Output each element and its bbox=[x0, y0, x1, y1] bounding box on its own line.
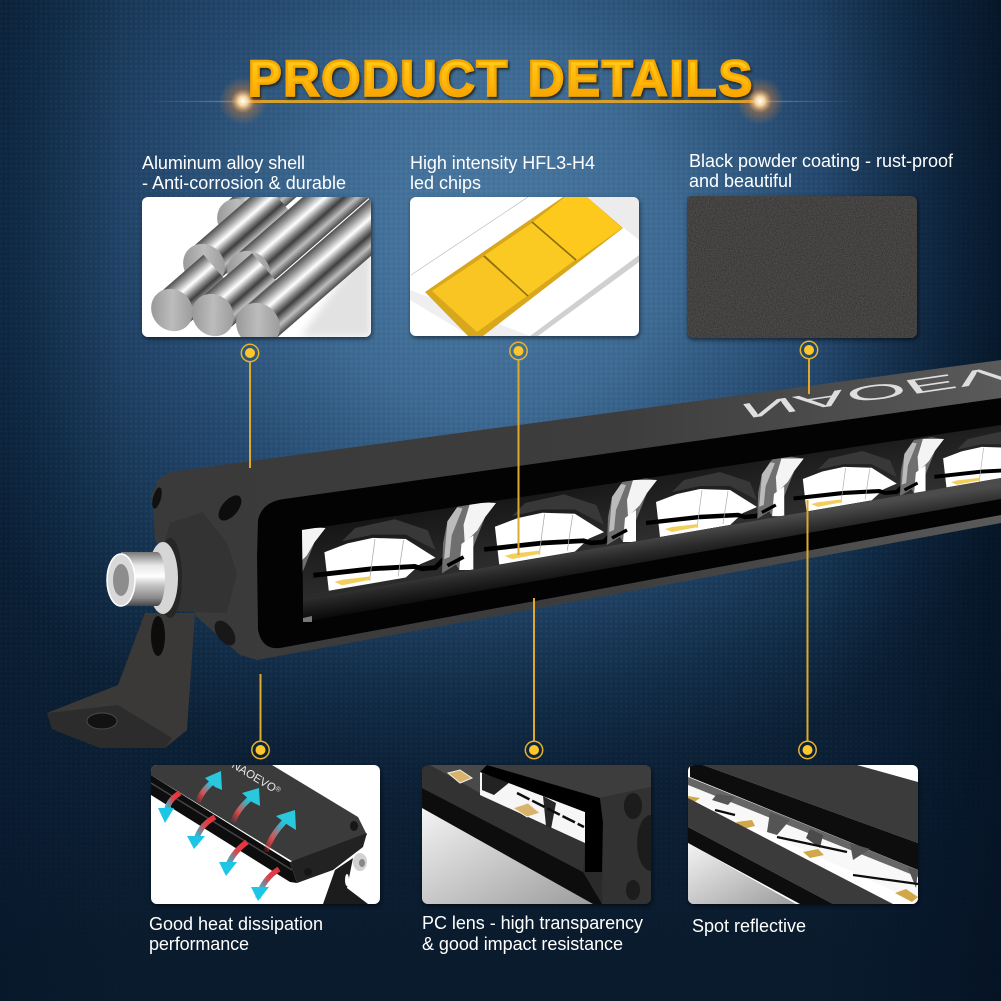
brand lettering on small bar: NAOEVO bbox=[229, 759, 278, 795]
connector: spot reflective bbox=[799, 500, 816, 759]
connector: led chips bbox=[510, 342, 527, 555]
title: product details bbox=[140, 50, 860, 125]
panel: black powder coating texture bbox=[687, 196, 917, 338]
rod stack bbox=[151, 197, 371, 337]
mounting bolt bbox=[107, 538, 182, 618]
caption: pc lens: & good impact resistance bbox=[422, 934, 623, 954]
caption: heat dissipation: performance bbox=[149, 934, 249, 954]
caption: pc lens: PC lens - high transparency bbox=[422, 913, 643, 933]
lens window detail bbox=[430, 765, 603, 872]
heat flow arrows bbox=[158, 771, 296, 901]
caption: black powder coating: and beautiful bbox=[689, 171, 792, 191]
mounting bracket bbox=[47, 613, 195, 748]
connector: powder coating bbox=[800, 341, 818, 394]
caption: high intensity led chips: High intensity HFL3-H4 bbox=[410, 153, 595, 173]
bar housing and end cap bbox=[152, 360, 1001, 660]
panel: pc lens photo bbox=[422, 765, 665, 904]
caption: black powder coating: Black powder coating - rust-proof bbox=[689, 151, 954, 171]
lens window with reflectors bbox=[270, 425, 1001, 622]
bar with fins bbox=[151, 765, 368, 904]
caption: heat dissipation: Good heat dissipation bbox=[149, 914, 323, 934]
panel: heat dissipation photo bbox=[151, 759, 380, 904]
reflector strip bbox=[688, 777, 918, 902]
title underline with lens flares bbox=[140, 77, 860, 125]
title text: PRODUCT bbox=[248, 50, 507, 106]
connector: aluminum shell bbox=[241, 344, 259, 468]
connector: heat dissipation bbox=[252, 674, 269, 759]
lens gloss band bbox=[303, 478, 1001, 622]
panel: aluminum rods photo bbox=[140, 196, 375, 342]
panel: spot reflective photo bbox=[688, 765, 918, 904]
brand lettering on small bar: ® bbox=[274, 785, 283, 795]
title text: DETAILS bbox=[528, 50, 752, 106]
connector: pc lens bbox=[525, 598, 543, 759]
panel: led chips photo bbox=[410, 197, 639, 336]
black bezel bbox=[257, 398, 1001, 648]
caption: aluminum alloy shell: Aluminum alloy shell bbox=[142, 153, 305, 173]
caption: spot reflective: Spot reflective bbox=[692, 916, 806, 936]
caption: aluminum alloy shell: - Anti-corrosion & durable bbox=[142, 173, 346, 193]
yellow chips bbox=[425, 197, 623, 336]
end cap holes bbox=[150, 486, 246, 649]
lens end cap bbox=[487, 765, 665, 904]
caption: high intensity led chips: led chips bbox=[410, 173, 481, 193]
boss around bolt bbox=[160, 512, 237, 613]
led light bar product bbox=[47, 354, 1001, 748]
